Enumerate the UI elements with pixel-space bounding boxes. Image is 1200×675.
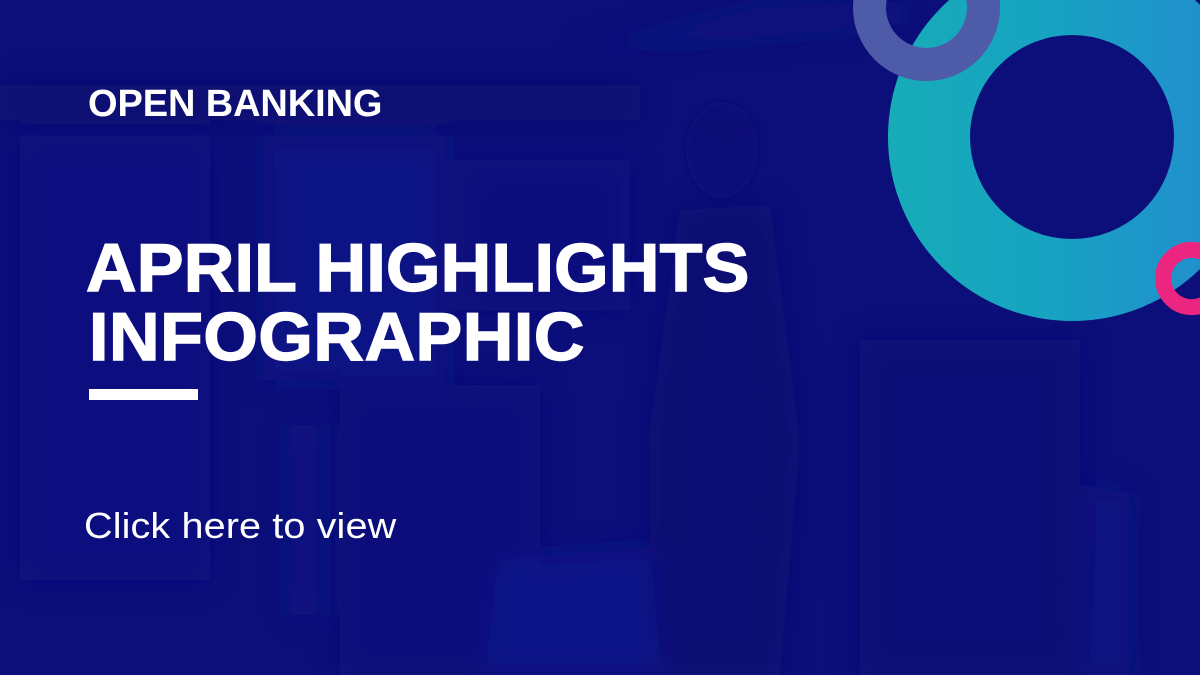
icon: muted purple ring bbox=[853, 0, 1000, 81]
title: INFOGRAPHIC bbox=[89, 299, 585, 375]
title bbox=[86, 230, 750, 375]
title: APRIL HIGHLIGHTS bbox=[86, 230, 750, 306]
icon: large teal ring bbox=[888, 0, 1200, 321]
icon: pink ring bbox=[1155, 242, 1200, 316]
brand heading: OPEN BANKING bbox=[88, 83, 382, 125]
title underline bbox=[89, 389, 198, 400]
call to action text: Click here to view bbox=[84, 505, 396, 546]
